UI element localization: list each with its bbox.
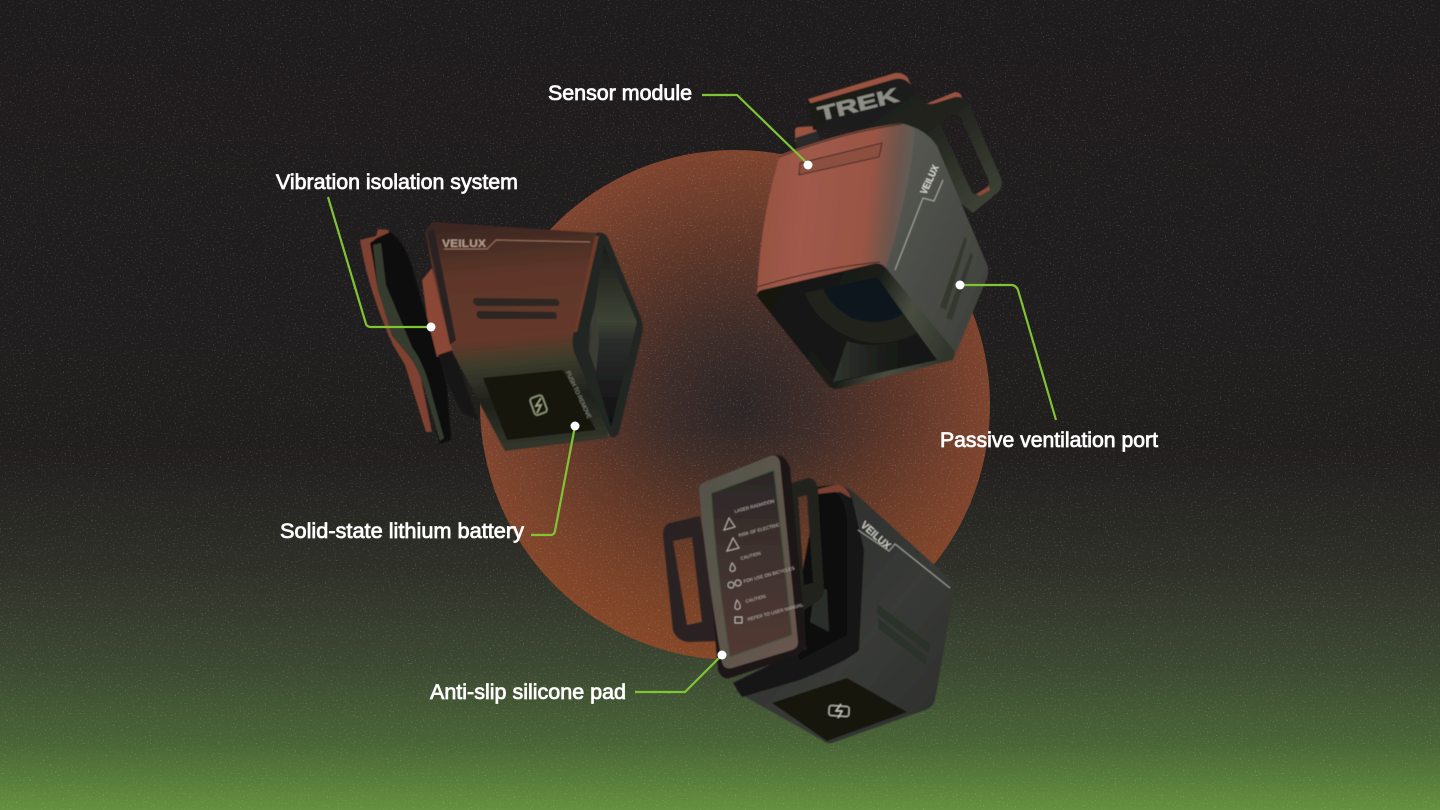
warning icons — [724, 518, 742, 623]
Veilux logo: VEILUX — [442, 238, 487, 250]
label: sensor module: Sensor module — [548, 82, 692, 105]
side handle — [663, 516, 722, 642]
label: vibration isolation system: Vibration isolation system — [276, 171, 518, 194]
lens hood rim — [757, 264, 955, 389]
device: left camera — [360, 222, 643, 451]
rear rim — [733, 484, 864, 697]
warning list — [734, 499, 804, 622]
vents — [940, 236, 973, 320]
body trim lines — [757, 124, 902, 287]
body side face — [735, 487, 954, 743]
lens hood opening — [773, 277, 937, 382]
battery icon — [829, 704, 849, 718]
inner red glint — [976, 186, 990, 196]
mount with handle — [808, 79, 1002, 213]
red trim — [574, 236, 599, 332]
rear mount plate red — [360, 229, 432, 432]
label: anti-slip silicone pad: Anti-slip silicone pad — [430, 681, 626, 704]
red edge — [815, 484, 851, 498]
warning list: FOR USE ON BICYCLES — [743, 566, 795, 584]
TREK logo: TREK — [816, 84, 902, 126]
hood opening — [588, 245, 637, 427]
lens glass — [823, 277, 903, 322]
silicone pad — [711, 470, 792, 657]
inner stem — [810, 585, 829, 632]
lens barrel — [805, 277, 917, 343]
rear mount black — [370, 232, 451, 444]
right handle — [786, 478, 824, 650]
grey side panel — [878, 123, 988, 362]
mounting plate — [699, 456, 798, 668]
main body — [425, 222, 608, 451]
Veilux logo: VEILUX — [919, 163, 942, 196]
vents — [877, 604, 930, 665]
battery pad — [483, 370, 596, 440]
mount handle outline — [373, 243, 444, 441]
leader: sensor module — [702, 95, 812, 170]
rear opening — [790, 492, 847, 660]
Veilux line mark — [895, 180, 943, 270]
warning list: REFER TO USER MANUAL — [747, 602, 804, 622]
warning list: RISK OF ELECTRIC — [738, 522, 781, 538]
battery icon — [529, 394, 548, 416]
warning list: CAUTION — [740, 551, 761, 561]
Veilux logo: VEILUX — [858, 519, 893, 553]
leader: passive ventilation — [956, 280, 1056, 420]
front hood — [572, 233, 643, 437]
leader: vibration isolation — [328, 197, 436, 332]
label: solid-state lithium battery: Solid-state lithium battery — [280, 520, 525, 543]
sensor window — [799, 143, 882, 175]
red tab rear — [795, 73, 962, 142]
device: bottom camera — [663, 455, 954, 743]
battery pad — [772, 678, 907, 741]
lower facet — [833, 333, 937, 382]
device: top camera — [757, 73, 1002, 389]
leader: silicone pad — [635, 650, 726, 692]
plate backing — [702, 455, 806, 678]
logo line — [858, 530, 950, 588]
logo underline — [444, 240, 590, 249]
push to remove text: PUSH TO REMOVE — [564, 370, 592, 420]
vents — [473, 298, 559, 319]
circle backdrop — [480, 150, 990, 660]
warning list: LASER RADIATION — [734, 499, 775, 514]
connector block — [422, 268, 453, 357]
body left edge highlight — [427, 228, 456, 345]
red top face — [757, 124, 915, 294]
inner lens sliver — [589, 307, 599, 372]
label: passive ventilation port: Passive ventilation port — [940, 429, 1158, 452]
leader: battery — [531, 422, 580, 535]
warning list: CAUTION — [745, 594, 766, 604]
